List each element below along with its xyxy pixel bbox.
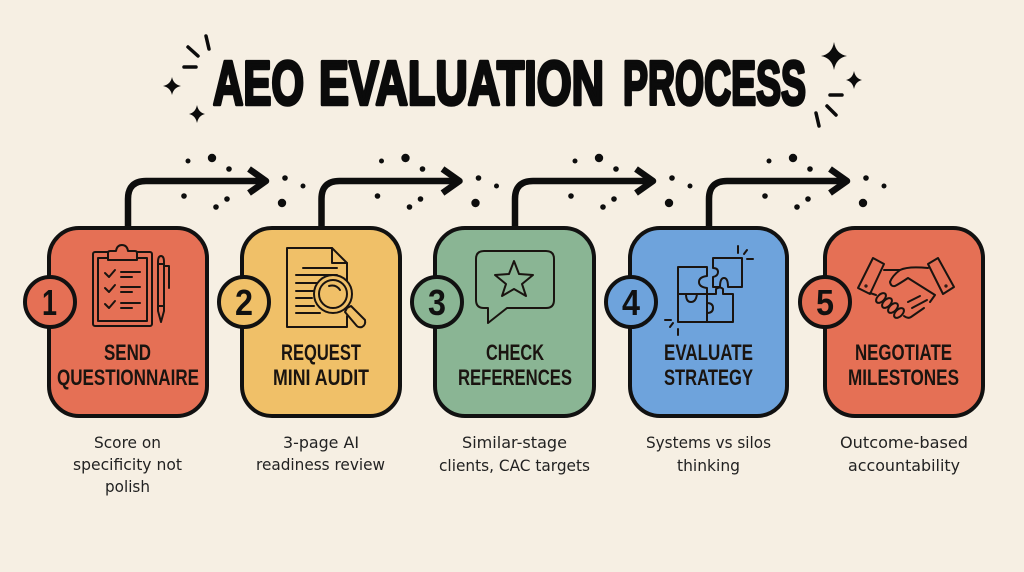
title: AEO (213, 50, 304, 118)
step 2 heading: REQUEST (281, 340, 361, 365)
step 3 heading: REFERENCES (458, 365, 572, 390)
caption step 5: Outcome-based (840, 433, 968, 452)
step 4 heading: STRATEGY (664, 365, 753, 390)
panel: step 5 negotiate milestones (800, 228, 983, 416)
number badge 3 (412, 277, 462, 327)
panel: step 4 evaluate strategy (606, 228, 787, 416)
panel: step 3 check references (412, 228, 594, 416)
number badge 1: 1 (42, 282, 57, 323)
number badge 5 (800, 277, 850, 327)
step 2 heading: MINI AUDIT (273, 365, 369, 390)
caption step 4: thinking (677, 456, 740, 475)
arrow 3 with dots (515, 154, 692, 226)
icon: puzzle pieces (665, 246, 753, 335)
number badge 3: 3 (428, 282, 446, 323)
number badge 2: 2 (235, 282, 253, 323)
panel: step 1 send questionnaire (25, 228, 207, 416)
step 5 heading: NEGOTIATE (855, 340, 952, 365)
caption step 4: Systems vs silos (646, 433, 771, 452)
step 4 heading: EVALUATE (664, 340, 753, 365)
caption step 3: clients, CAC targets (439, 456, 590, 475)
title: EVALUATION (319, 50, 604, 118)
icon: title sparkles left (163, 36, 209, 123)
caption step 2: readiness review (256, 455, 385, 474)
caption step 5: accountability (848, 456, 960, 475)
arrow 4 with dots (709, 154, 886, 226)
step 1 heading: SEND (104, 340, 151, 365)
number badge 5: 5 (816, 282, 834, 323)
icon: clipboard and pen (93, 245, 169, 326)
arrow 1 with dots (128, 154, 306, 226)
icon: title sparkles right (816, 42, 862, 126)
icon: speech bubble with star (476, 251, 554, 323)
number badge 1 (25, 277, 75, 327)
title: PROCESS (623, 50, 806, 118)
step 5 heading: MILESTONES (848, 365, 959, 390)
caption step 1: Score on (94, 433, 161, 452)
caption step 3: Similar-stage (462, 433, 567, 452)
icon: document with magnifier (287, 248, 365, 327)
caption step 1: polish (105, 477, 150, 496)
caption step 1: specificity not (73, 455, 182, 474)
step 3 heading: CHECK (486, 340, 544, 365)
caption step 2: 3-page AI (283, 433, 359, 452)
arrow 2 with dots (322, 154, 499, 226)
number badge 4 (606, 277, 656, 327)
step 1 heading: QUESTIONNAIRE (57, 365, 199, 390)
number badge 2 (219, 277, 269, 327)
number badge 4: 4 (622, 282, 640, 323)
icon: handshake (858, 258, 954, 320)
panel: step 2 request mini audit (219, 228, 400, 416)
